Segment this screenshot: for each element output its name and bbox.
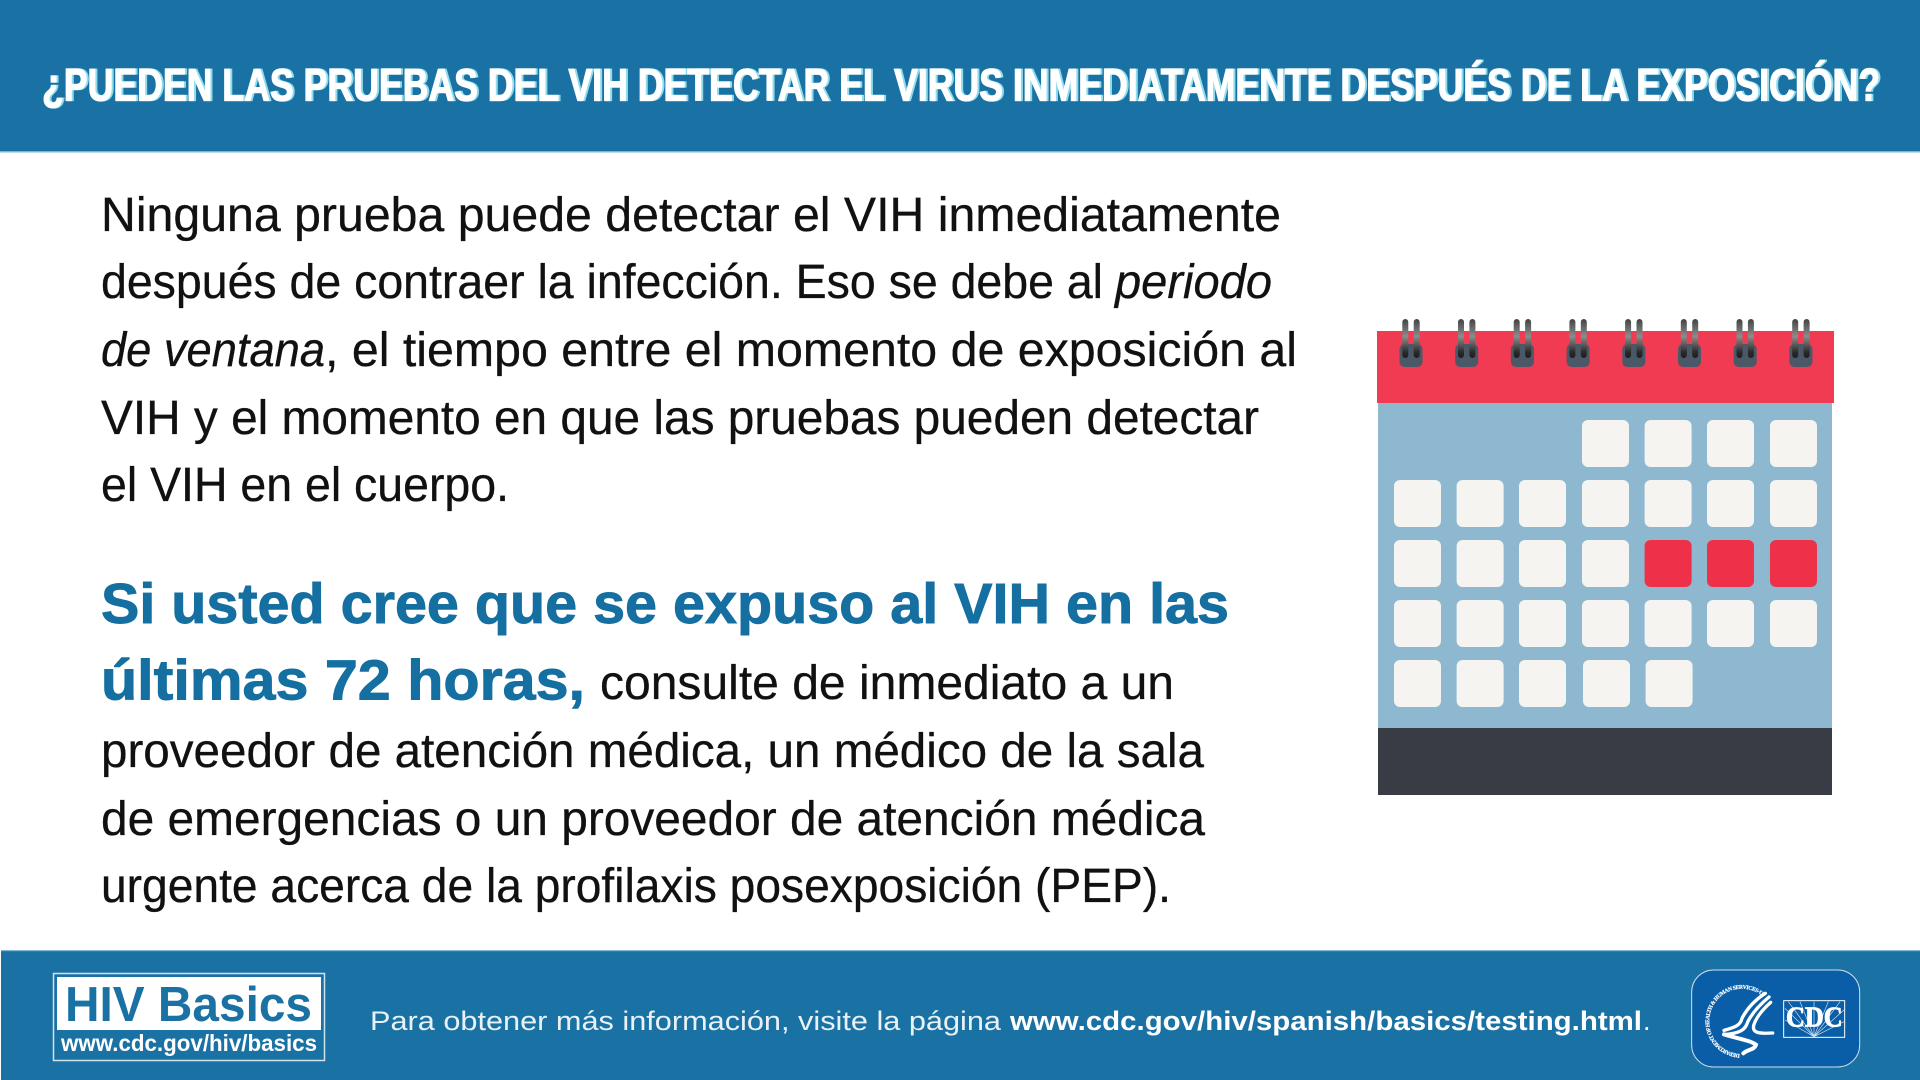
intro paragraph: , el tiempo entre el momento de exposición al (325, 324, 1297, 377)
HIV Basics badge (54, 974, 324, 1060)
intro paragraph: de ventana (101, 324, 325, 377)
intro paragraph: el VIH en el cuerpo. (101, 459, 509, 512)
intro paragraph (101, 189, 1297, 512)
intro paragraph: Ninguna prueba puede detectar el VIH inmediatamente (101, 189, 1281, 242)
action body text: urgente acerca de la profilaxis posexposición (PEP). (101, 860, 1171, 913)
highlighted heading (101, 572, 1229, 712)
calendar body (1378, 403, 1832, 728)
highlighted heading: últimas 72 horas, (101, 648, 585, 712)
HIV Basics badge: HIV Basics (65, 978, 312, 1032)
highlighted calendar days (1645, 540, 1817, 587)
header band (0, 0, 1920, 152)
calendar base (1378, 728, 1832, 795)
calendar binding rings (1400, 319, 1812, 367)
call to action paragraph (101, 572, 1229, 913)
HIV Basics badge: www.cdc.gov/hiv/basics (60, 1030, 317, 1056)
action body text: proveedor de atención médica, un médico de la sala (101, 725, 1204, 778)
action body text: de emergencias o un proveedor de atención médica (101, 793, 1205, 846)
footer note: www.cdc.gov/hiv/spanish/basics/testing.html (1009, 1006, 1642, 1036)
icon: CDC mark: CDC (1786, 1003, 1843, 1034)
intro paragraph: VIH y el momento en que las pruebas pueden detectar (101, 392, 1259, 445)
intro paragraph: después de contraer la infección. Eso se debe al (101, 256, 1103, 309)
calendar header (1377, 331, 1834, 403)
footer band (1, 950, 1920, 1080)
HHS and CDC logo (1691, 970, 1860, 1068)
footer note (370, 1006, 1651, 1036)
icon: HHS eagle seal: DEPARTMENT OF HEALTH & HUMAN SERVICES·USA (1705, 984, 1764, 1058)
calendar day cells (1394, 420, 1817, 707)
action body text: consulte de inmediato a un (600, 657, 1174, 710)
highlighted heading: Si usted cree que se expuso al VIH en las (101, 572, 1229, 636)
icon: HHS eagle seal (1705, 984, 1774, 1058)
footer note: . (1643, 1006, 1651, 1036)
intro paragraph: periodo (1113, 256, 1272, 309)
action body text (101, 657, 1205, 913)
icon: calendar (1377, 319, 1834, 795)
footer note: Para obtener más información, visite la página (370, 1006, 1002, 1036)
